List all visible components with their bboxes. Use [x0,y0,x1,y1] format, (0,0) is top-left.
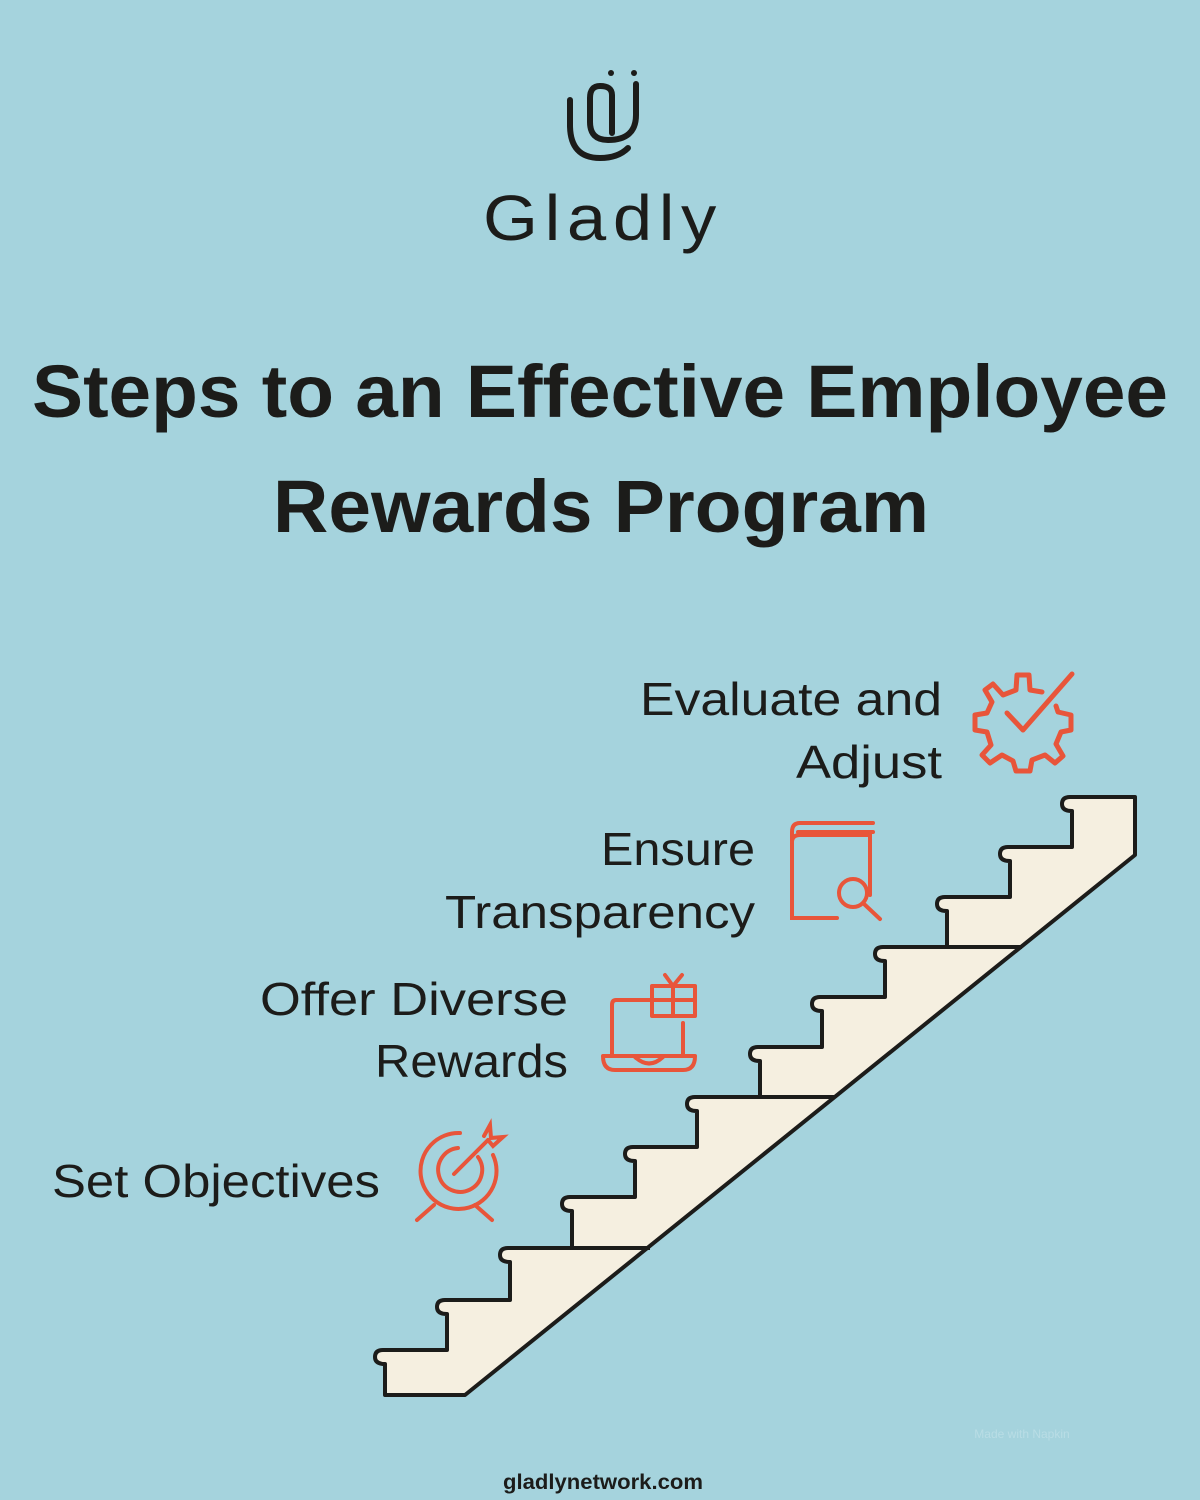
title: Rewards Program [273,465,929,548]
staircase [375,797,1135,1395]
step 3 label: Ensure Transparency [445,823,755,938]
step 4 label: Evaluate and Adjust: Evaluate and [640,673,942,725]
icon: logo mark [570,70,637,158]
icon: book with magnifier [792,823,880,919]
footer: website: gladlynetwork.com [503,1471,703,1494]
title [32,350,1168,548]
title: Steps to an Effective Employee [32,350,1168,433]
logo wordmark: Gladly [483,182,723,254]
logo [483,70,723,254]
step 2 label: Offer Diverse Rewards: Rewards [375,1035,568,1087]
step 4 label: Evaluate and Adjust [640,673,942,788]
icon: gear with check [975,674,1072,771]
step 2 label: Offer Diverse Rewards [260,973,568,1087]
watermark: Made with Napkin [974,1427,1070,1441]
step 1 label: Set Objectives: Set Objectives [52,1155,380,1207]
icon: target with arrow [417,1125,503,1220]
step 3 label: Ensure Transparency: Ensure [601,823,755,875]
step 2 label: Offer Diverse Rewards: Offer Diverse [260,973,568,1025]
icon: laptop with gift [603,975,695,1070]
step 4 label: Evaluate and Adjust: Adjust [796,736,942,788]
step 3 label: Ensure Transparency: Transparency [445,886,755,938]
